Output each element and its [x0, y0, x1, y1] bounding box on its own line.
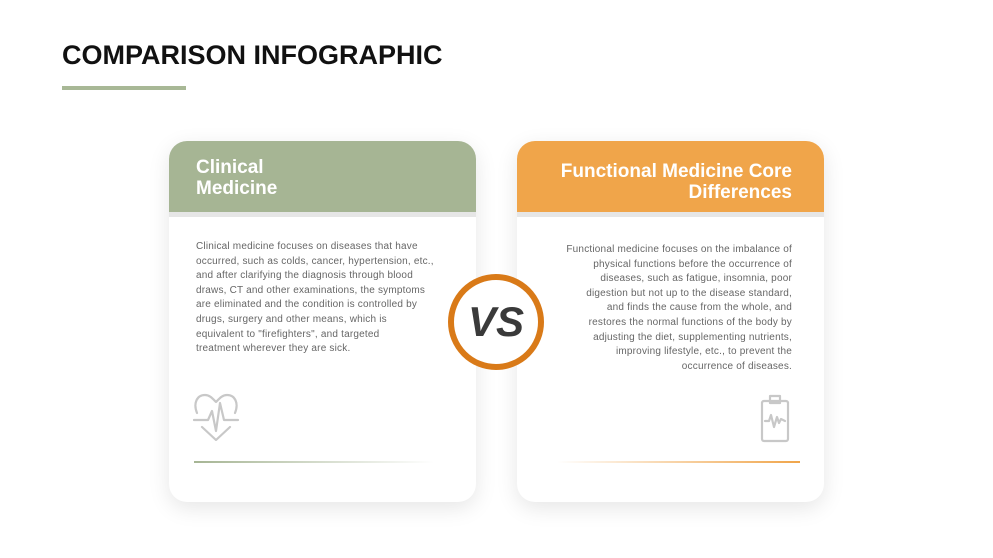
text block: functional: adjusting the diet, supplementing nutrients, — [593, 332, 792, 343]
divider line green — [194, 461, 434, 463]
text block: functional: occurrence of diseases. — [682, 361, 792, 372]
text block: clinical: treatment wherever they are sick. — [196, 343, 350, 354]
text block: functional: diseases, such as fatigue, insomnia, poor — [600, 273, 792, 284]
heading: clinical medicine — [169, 141, 476, 212]
icon: heart pulse — [193, 394, 239, 441]
icon: VS circle: VS — [468, 298, 524, 345]
divider line orange — [557, 461, 800, 463]
text block: clinical: draws, CT and other examinations, the symptoms — [196, 285, 425, 296]
text block: functional — [566, 244, 792, 372]
text block: clinical: and after clarifying the diagnosis through blood — [196, 270, 413, 281]
heading: functional medicine: Differences — [688, 182, 792, 203]
text block: clinical: occurred, such as colds, cancer, hypertension, etc., — [196, 256, 434, 267]
text block: functional: digestion but not up to the disease standard, — [586, 288, 792, 299]
icon: VS circle — [448, 274, 544, 370]
heading: functional medicine: Functional Medicine Core — [561, 161, 792, 182]
text block: clinical: Clinical medicine focuses on diseases that have — [196, 241, 418, 252]
heading: clinical medicine: Clinical — [196, 157, 264, 178]
heading: clinical medicine: Medicine — [196, 178, 277, 199]
title underline — [62, 86, 186, 90]
heading: functional medicine — [517, 141, 824, 212]
icon: clipboard — [760, 394, 790, 442]
text block: clinical: equivalent to "firefighters", and targeted — [196, 329, 379, 340]
panel: clinical medicine — [169, 141, 476, 502]
text block: functional: improving lifestyle, etc., to prevent the — [616, 346, 792, 357]
text block: functional: physical functions before the occurrence of — [593, 259, 792, 270]
text block: clinical — [196, 241, 434, 354]
text block: functional: restores the normal functions of the body by — [589, 317, 792, 328]
text block: functional: and finds the cause from the whole, and — [607, 302, 792, 313]
panel: functional medicine — [517, 141, 824, 502]
title: COMPARISON INFOGRAPHIC — [62, 40, 443, 70]
text block: clinical: are eliminated and the condition is controlled by — [196, 299, 417, 310]
text block: clinical: drugs, surgery and other means, which is — [196, 314, 387, 325]
text block: functional: Functional medicine focuses on the imbalance of — [566, 244, 792, 255]
